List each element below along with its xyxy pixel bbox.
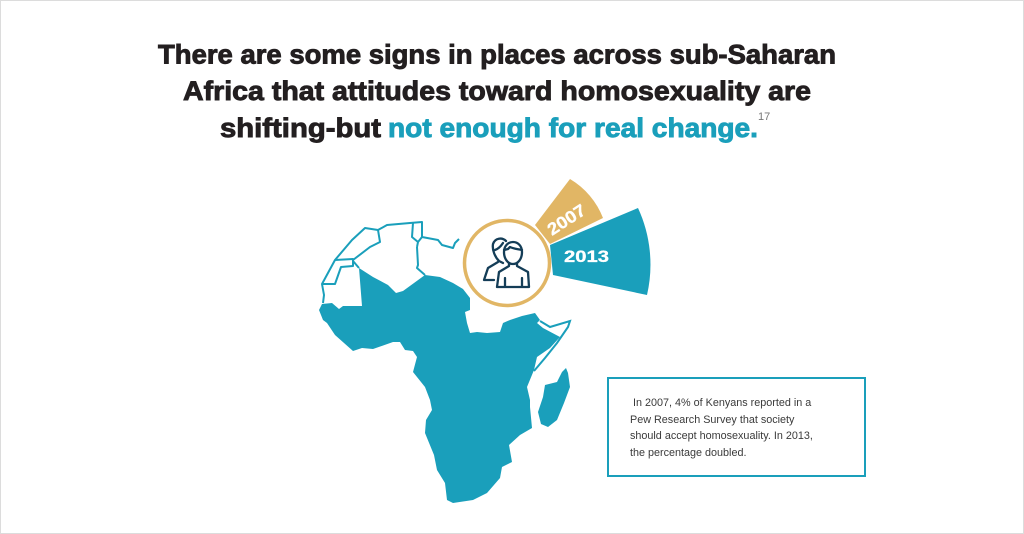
callout text box (607, 377, 866, 477)
icon: two people (484, 239, 529, 287)
callout text (630, 397, 813, 459)
Somalia outline (534, 321, 570, 371)
wedge 2013 (550, 208, 650, 295)
label 2007: 2007 (544, 201, 589, 239)
title: shifting-but (220, 113, 381, 143)
title: not enough for real change. (388, 113, 758, 143)
title: Africa that attitudes toward homosexuality are (183, 76, 811, 106)
wedge 2007 (535, 179, 603, 244)
sub-Saharan Africa shape (319, 268, 560, 503)
Libya and Algeria border (417, 247, 425, 275)
Morocco and Algeria border (353, 230, 380, 268)
Western Sahara (322, 259, 353, 284)
title: There are some signs in places across sub-Saharan (158, 40, 836, 70)
map of Africa (319, 222, 570, 503)
coast (322, 222, 459, 303)
title (158, 40, 836, 143)
Tunisia (412, 223, 422, 247)
callout text: the percentage doubled. (630, 447, 746, 459)
Madagascar (538, 368, 570, 427)
callout text: In 2007, 4% of Kenyans reported in a (633, 397, 811, 409)
label 2013: 2013 (564, 247, 609, 266)
circle with people icon (464, 220, 550, 306)
callout text: Pew Research Survey that society (630, 414, 794, 426)
footnote number: 17 (758, 111, 770, 123)
callout text: should accept homosexuality. In 2013, (630, 430, 813, 442)
north Africa outlines (322, 222, 459, 303)
